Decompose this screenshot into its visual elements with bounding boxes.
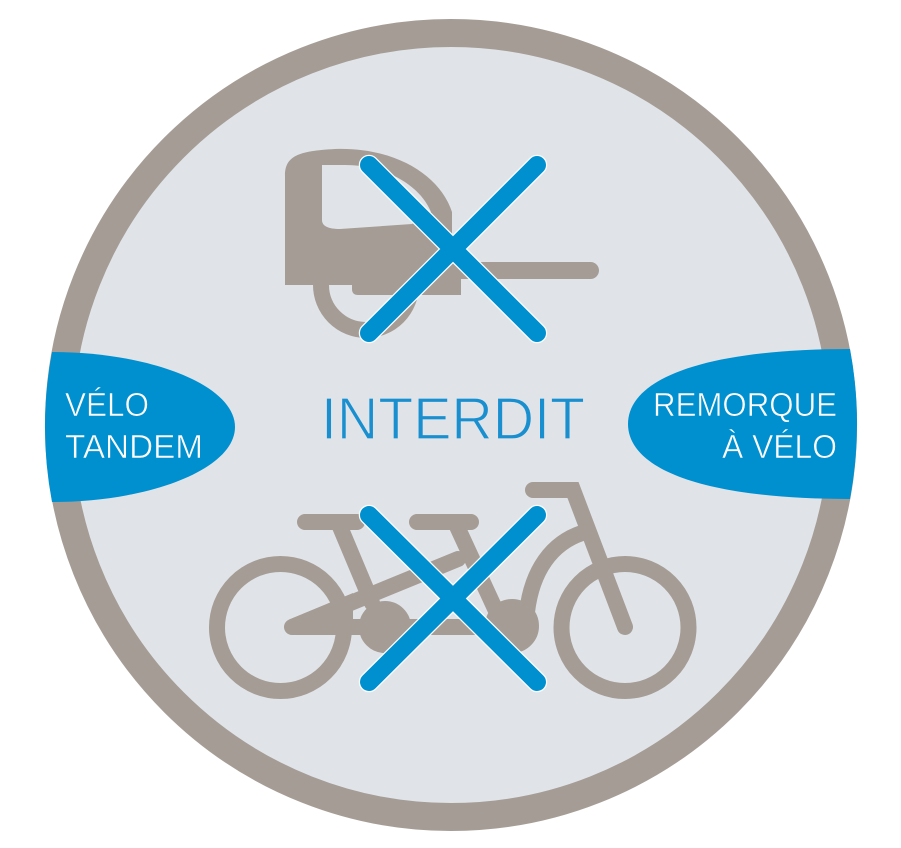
icon: tandem bicycle [217,490,688,691]
icon: blue cross over tandem [369,515,537,682]
badge: vélo tandem: TANDEM [65,428,203,465]
icon: bike trailer [285,149,599,330]
badge: vélo tandem [45,352,235,502]
badge: remorque à vélo: REMORQUE [653,386,837,423]
badge: remorque à vélo: À VÉLO [722,428,837,465]
heading: interdit: INTERDIT [321,386,585,452]
badge: remorque à vélo [628,349,857,499]
badge: vélo tandem: VÉLO [65,386,149,423]
icon: blue cross over trailer [369,165,537,333]
